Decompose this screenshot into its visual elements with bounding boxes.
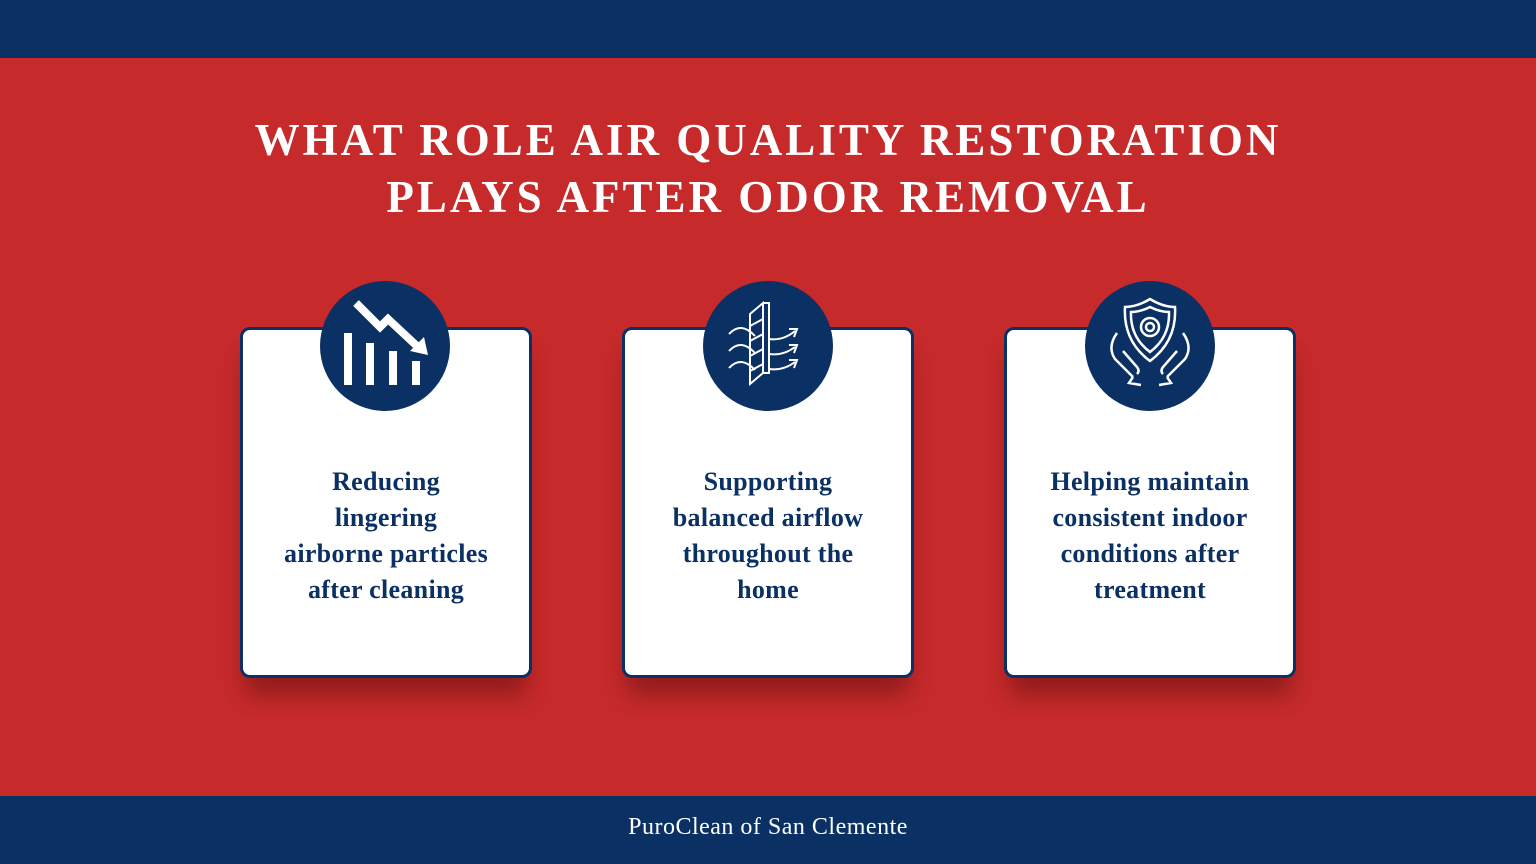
title <box>255 115 1281 222</box>
card 3: Helping maintain <box>1050 467 1250 496</box>
card 1: lingering <box>335 503 437 532</box>
card 1 <box>240 327 532 678</box>
card 3: treatment <box>1094 575 1206 604</box>
title: PLAYS AFTER ODOR REMOVAL <box>386 172 1150 222</box>
footer: PuroClean of San Clemente <box>628 814 908 840</box>
title: WHAT ROLE AIR QUALITY RESTORATION <box>255 115 1281 165</box>
card 3 <box>1004 327 1296 678</box>
icon: shield hands <box>1085 281 1215 411</box>
card 2: Supporting <box>704 467 832 496</box>
card 3: consistent indoor <box>1052 503 1248 532</box>
card 2: home <box>737 575 799 604</box>
card 1: Reducing <box>332 467 440 496</box>
card 1: airborne particles <box>284 539 488 568</box>
card 2: throughout the <box>683 539 853 568</box>
icon: chart down <box>320 281 450 411</box>
icon: air filter <box>703 281 833 411</box>
card 3: conditions after <box>1061 539 1239 568</box>
card 2: balanced airflow <box>673 503 863 532</box>
card 1: after cleaning <box>308 575 464 604</box>
card 2 <box>622 327 914 678</box>
